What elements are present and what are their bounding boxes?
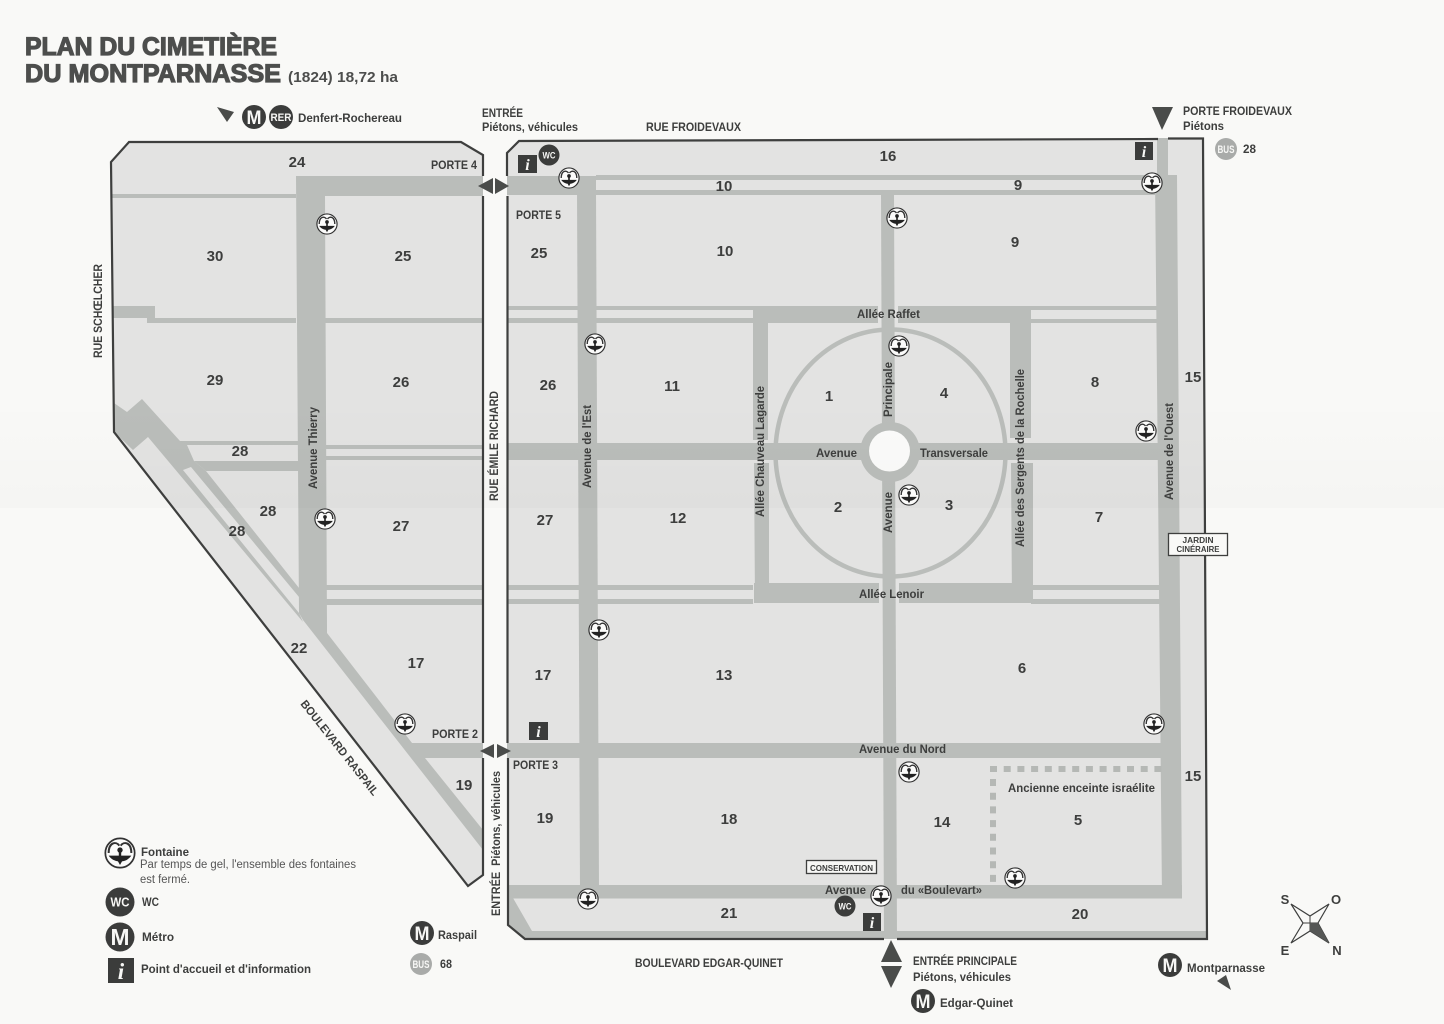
legend: WC xyxy=(106,888,159,916)
gate labels: PORTE 3 xyxy=(513,760,558,772)
road: central roundabout xyxy=(860,422,920,482)
compass: N xyxy=(1332,943,1342,958)
label: porte Froidevaux: PORTE FROIDEVAUX xyxy=(1183,106,1292,118)
gate labels xyxy=(431,160,562,772)
label: rue Froidevaux: RUE FROIDEVAUX xyxy=(646,122,741,134)
icons: WC on the map: WC xyxy=(838,902,852,912)
road: thin alleys xyxy=(111,194,483,605)
title: DU MONTPARNASSE xyxy=(25,60,281,88)
gate labels: PORTE 5 xyxy=(516,210,562,222)
label: Denfert-Rochereau xyxy=(242,105,402,129)
road labels: Avenue de l'Ouest xyxy=(1164,403,1176,500)
label: métro Montparnasse xyxy=(1158,953,1265,977)
road labels: Avenue xyxy=(816,448,857,460)
plot numbers: 1 xyxy=(825,388,833,405)
label: métro Raspail xyxy=(410,921,477,945)
label: rue Schœlcher: RUE SCHŒLCHER xyxy=(93,263,105,358)
plot numbers: 22 xyxy=(291,640,307,657)
road: thin alleys right xyxy=(1030,306,1160,604)
road: Allée des Sergents de la Rochelle xyxy=(1010,306,1033,603)
label: bus 28 xyxy=(1215,138,1257,160)
plot numbers: 12 xyxy=(670,510,686,527)
plot numbers: 24 xyxy=(289,154,306,171)
plot numbers: 28 xyxy=(229,523,245,540)
road: Avenue du Boulevart xyxy=(508,885,1182,898)
road labels: Principale xyxy=(883,362,895,417)
compass: O xyxy=(1331,892,1341,907)
plot numbers: 25 xyxy=(531,245,547,262)
legend: information point: Point d'accueil et d'information xyxy=(141,964,311,976)
road labels: Avenue xyxy=(883,492,895,533)
panel: right section of the cemetery xyxy=(507,138,1207,939)
label: Denfert-Rochereau: M xyxy=(246,108,262,129)
title: (1824) 18,72 ha xyxy=(288,69,399,86)
plot numbers: 28 xyxy=(232,443,248,460)
label: porte Froidevaux xyxy=(1183,106,1292,133)
road: Avenue Transversale xyxy=(507,443,1160,460)
road labels: Transversale xyxy=(920,448,988,460)
icons: information points on the map: i xyxy=(536,724,541,741)
plot numbers: 26 xyxy=(540,377,556,394)
label: bus 68 xyxy=(410,953,453,975)
road labels: Avenue du Nord xyxy=(859,744,946,756)
road: oval xyxy=(776,330,1006,576)
legend: WC: WC xyxy=(110,896,130,910)
plot numbers: 27 xyxy=(537,512,553,529)
plot numbers: 9 xyxy=(1014,177,1022,194)
road: Allée Raffet xyxy=(753,306,1030,323)
plot numbers: 4 xyxy=(940,385,949,402)
road: Avenue du Nord xyxy=(507,743,1165,758)
label: rue Émile Richard: RUE ÉMILE RICHARD xyxy=(488,391,501,501)
box: conservation: CONSERVATION xyxy=(810,863,873,873)
road labels: Allée Raffet xyxy=(857,309,920,321)
label: métro Montparnasse: M xyxy=(1162,956,1178,977)
legend: information point xyxy=(108,958,311,984)
plot numbers: 16 xyxy=(880,148,896,165)
compass xyxy=(1281,892,1342,958)
plot numbers: 27 xyxy=(393,518,409,535)
legend: information point: i xyxy=(118,959,125,984)
legend: métro: Métro xyxy=(142,932,174,944)
plot numbers: 8 xyxy=(1091,374,1099,391)
outline: left section xyxy=(111,142,483,886)
legend: métro: M xyxy=(110,924,130,950)
label: entrée Froidevaux side: Piétons, véhicules xyxy=(482,122,578,134)
road: top alley and Avenue Thierry xyxy=(296,176,483,633)
arrow: towards Denfert-Rochereau xyxy=(217,107,234,122)
label: entrée rue Émile Richard: ENTRÉE Piétons, véhicules xyxy=(490,771,503,916)
plot numbers: 18 xyxy=(721,811,737,828)
gate arrows: porte 4 and 5 xyxy=(478,178,509,194)
legend: fountain: est fermé. xyxy=(140,874,190,886)
compass: E xyxy=(1281,943,1290,958)
plot numbers: 13 xyxy=(716,667,732,684)
arrow: towards Montparnasse xyxy=(1217,975,1231,990)
box: jardin cinéraire xyxy=(1168,534,1228,556)
plot numbers xyxy=(207,148,1201,923)
label: bus 28: 28 xyxy=(1243,144,1257,156)
legend xyxy=(105,838,356,984)
plot numbers: 7 xyxy=(1095,509,1103,526)
plot numbers: 25 xyxy=(395,248,411,265)
road labels: Allée Chauveau Lagarde xyxy=(755,386,767,517)
road labels: Avenue Thierry xyxy=(308,406,320,489)
plot numbers: 17 xyxy=(535,667,551,684)
plot numbers: 19 xyxy=(537,810,553,827)
road: diagonal cluster with its two branches xyxy=(114,399,303,622)
title: PLAN DU CIMETIÈRE xyxy=(25,32,277,61)
plot numbers: 21 xyxy=(721,905,737,922)
road labels: Avenue de l'Est xyxy=(582,405,594,488)
plot numbers: 2 xyxy=(834,499,842,516)
label: métro Edgar-Quinet: Edgar-Quinet xyxy=(940,998,1013,1010)
gate arrows: porte 2 and 3 xyxy=(480,744,511,758)
legend: fountain: Par temps de gel, l'ensemble des fontaines xyxy=(140,859,356,871)
label: métro Edgar-Quinet: M xyxy=(916,992,930,1013)
plot numbers: 17 xyxy=(408,655,424,672)
box: jardin cinéraire: CINÉRAIRE xyxy=(1176,545,1220,554)
arrow: entrée principale xyxy=(881,940,902,988)
plot numbers: 14 xyxy=(934,814,951,831)
legend: WC: WC xyxy=(142,897,159,909)
gate labels: PORTE 4 xyxy=(431,160,478,172)
plot numbers: 3 xyxy=(945,497,953,514)
road: Avenue Principale xyxy=(881,195,897,939)
dashed line: ancienne enceinte israélite xyxy=(990,769,1162,883)
label: boulevard Edgar-Quinet: BOULEVARD EDGAR-QUINET xyxy=(635,958,783,970)
label: entrée principale: ENTRÉE PRINCIPALE xyxy=(913,955,1017,968)
plot numbers: 10 xyxy=(716,178,732,195)
road: Avenue de l'Est xyxy=(577,190,599,890)
road: top alleys xyxy=(507,175,1155,195)
arrow: porte Froidevaux xyxy=(1152,107,1173,130)
plot numbers: 5 xyxy=(1074,812,1082,829)
road labels xyxy=(308,309,1176,897)
label: Denfert-Rochereau: Denfert-Rochereau xyxy=(298,113,402,125)
road labels: Allée Lenoir xyxy=(859,589,925,601)
label: Denfert-Rochereau: RER xyxy=(270,112,292,124)
plot numbers: 19 xyxy=(456,777,472,794)
icons: information points on the map: i xyxy=(525,157,530,174)
plot numbers: 11 xyxy=(664,378,680,395)
icons: WC on the map xyxy=(538,144,856,916)
road: thin alleys left xyxy=(507,306,753,604)
icons: information points on the map xyxy=(518,142,1153,932)
label: entrée Froidevaux side: ENTRÉE xyxy=(482,107,523,120)
label: entrée principale: Piétons, véhicules xyxy=(913,972,1011,984)
plot numbers: 6 xyxy=(1018,660,1026,677)
label: bus 68: BUS xyxy=(412,959,430,971)
plot numbers: 15 xyxy=(1185,369,1201,386)
road labels: Avenue xyxy=(825,885,866,897)
panel: left section of the cemetery xyxy=(111,142,483,886)
road labels: du «Boulevart» xyxy=(901,885,982,897)
plot numbers: 28 xyxy=(260,503,276,520)
road: long diagonal towards porte 2 xyxy=(299,590,483,850)
legend: fountain xyxy=(105,838,356,886)
label: boulevard Raspail: BOULEVARD RASPAIL xyxy=(298,698,380,798)
box: jardin cinéraire: JARDIN xyxy=(1182,536,1214,545)
label: métro Montparnasse: Montparnasse xyxy=(1187,963,1265,975)
plot numbers: 26 xyxy=(393,374,409,391)
road: Allée Chauveau Lagarde xyxy=(753,306,769,603)
title xyxy=(25,32,399,88)
plot numbers: 15 xyxy=(1185,768,1201,785)
label: bus 68: 68 xyxy=(440,959,453,971)
road labels: Ancienne enceinte israélite xyxy=(1008,783,1155,795)
road labels: Allée des Sergents de la Rochelle xyxy=(1015,369,1027,547)
label: métro Raspail: Raspail xyxy=(438,930,477,942)
plot numbers: 29 xyxy=(207,372,223,389)
gate labels: PORTE 2 xyxy=(432,729,478,741)
icons: information points on the map: i xyxy=(870,915,875,932)
plot numbers: 10 xyxy=(717,243,733,260)
icons: fountains on the map xyxy=(315,168,1164,909)
plot numbers: 30 xyxy=(207,248,223,265)
icons: information points on the map: i xyxy=(1142,144,1147,161)
roundabout centre xyxy=(869,430,910,472)
label: porte Froidevaux: Piétons xyxy=(1183,121,1224,133)
label: métro Edgar-Quinet xyxy=(911,989,1013,1013)
label: entrée Froidevaux side xyxy=(482,107,578,134)
road: Allée Lenoir xyxy=(754,583,1032,603)
road: Avenue de l'Ouest xyxy=(1155,138,1182,898)
plot numbers: 9 xyxy=(1011,234,1019,251)
plot numbers: 20 xyxy=(1072,906,1088,923)
label: bus 28: BUS xyxy=(1218,144,1234,156)
legend: fountain: Fontaine xyxy=(141,847,189,859)
outline: right section xyxy=(507,138,1207,939)
road: bottom and left strip xyxy=(508,898,1206,939)
label: métro Raspail: M xyxy=(414,924,430,945)
label: entrée principale xyxy=(913,955,1017,984)
compass: S xyxy=(1281,892,1290,907)
icons: WC on the map: WC xyxy=(542,150,556,160)
legend: métro xyxy=(106,922,174,952)
